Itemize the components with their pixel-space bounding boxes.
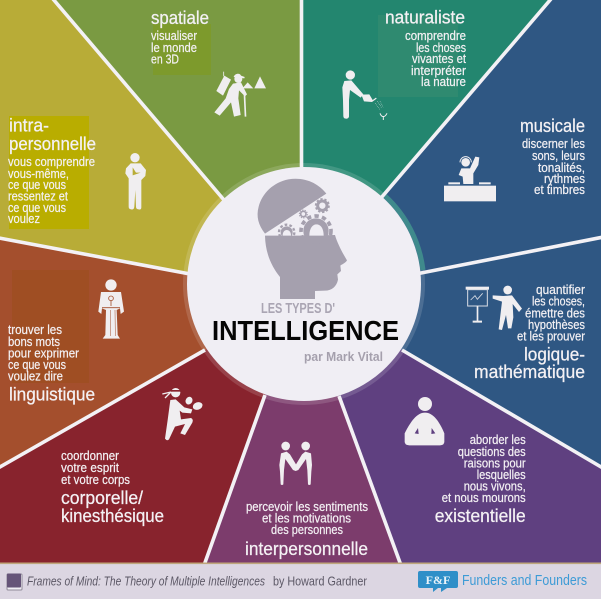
text: existentielle: existentielle xyxy=(435,506,526,526)
footer author: by Howard Gardner xyxy=(273,574,368,589)
text: existentielle: aborder les xyxy=(470,433,526,447)
text: naturaliste: naturaliste xyxy=(385,8,465,28)
text: logique-mathématique: mathématique xyxy=(474,362,585,382)
icon: person watering plant xyxy=(342,70,387,120)
text: existentielle: nous vivons, xyxy=(464,480,526,494)
text: logique-mathématique: hypothèses xyxy=(528,318,585,332)
text: logique-mathématique: émettre des xyxy=(525,307,585,321)
text: spatiale: en 3D xyxy=(151,52,179,66)
text: musicale: et timbres xyxy=(534,183,585,197)
text: musicale: tonalités, xyxy=(538,161,585,175)
text: logique-mathématique: les choses, xyxy=(532,295,585,309)
text: naturaliste xyxy=(385,8,466,89)
text: logique-mathématique: quantifier xyxy=(536,283,585,297)
icon: thinking person xyxy=(125,153,146,209)
sector: spatiale xyxy=(54,0,304,284)
footer citation: Frames of Mind: The Theory of Multiple Intelligences xyxy=(27,574,265,589)
highlight box: intra-personnelle xyxy=(9,116,89,229)
logo: F&F xyxy=(418,571,458,592)
sector: intra-personnelle xyxy=(0,0,304,284)
highlight box: naturaliste xyxy=(378,15,458,97)
text: intra-personnelle: vous-même, xyxy=(8,167,69,181)
icon: DJ xyxy=(444,157,496,201)
text: interpersonnelle: et les motivations xyxy=(262,512,351,526)
text: interpersonnelle: interpersonnelle xyxy=(245,539,368,559)
footer bar xyxy=(0,562,601,599)
text: interpersonnelle: des personnes xyxy=(271,523,343,537)
sector: linguistique xyxy=(0,238,304,467)
centre ring xyxy=(183,163,425,405)
text: musicale: sons, leurs xyxy=(532,149,585,163)
text: corporelle/kinesthésique: corporelle/ xyxy=(61,488,143,508)
text: intra-personnelle: ce que vous xyxy=(8,201,66,215)
text: spatiale: le monde xyxy=(151,41,197,55)
text: linguistique xyxy=(8,323,95,405)
text: corporelle/kinesthésique: et votre corps xyxy=(61,473,130,487)
icon: meditating figure xyxy=(405,397,444,445)
highlight box: linguistique xyxy=(12,270,89,383)
icon: boxer xyxy=(162,388,204,440)
text: naturaliste: interpréter xyxy=(411,64,466,78)
text: existentielle xyxy=(435,433,526,526)
text: existentielle: lesquelles xyxy=(477,468,526,482)
text: intra-personnelle: personnelle xyxy=(9,134,96,154)
text: spatiale: spatiale xyxy=(151,8,209,28)
text: existentielle: raisons pour xyxy=(464,457,526,471)
text: logique-mathématique xyxy=(474,283,585,382)
text: musicale xyxy=(520,116,585,197)
text: intra-personnelle: vous comprendre xyxy=(8,155,95,169)
text: logique-mathématique: et les prouver xyxy=(517,330,585,344)
icon: two people shaking hands xyxy=(279,442,312,485)
text: existentielle: questions des xyxy=(458,445,526,459)
logo: F&F: F&F xyxy=(426,573,450,587)
icon: hiker xyxy=(214,72,266,117)
text: linguistique: pour exprimer xyxy=(8,347,79,361)
ring tint: musicale xyxy=(385,196,423,270)
sector: corporelle/kinesthésique xyxy=(0,284,304,563)
text: linguistique: voulez dire xyxy=(8,370,63,384)
text: naturaliste: la nature xyxy=(421,75,466,89)
text: corporelle/kinesthésique: coordonner xyxy=(61,449,119,463)
text: musicale: rythmes xyxy=(544,172,585,186)
sector: musicale xyxy=(304,0,601,284)
text: corporelle/kinesthésique: votre esprit xyxy=(61,461,119,475)
sector: naturaliste xyxy=(302,0,550,284)
text: intra-personnelle: intra- xyxy=(9,116,49,136)
text: intra-personnelle: ce que vous xyxy=(8,178,66,192)
icon: speaker at podium xyxy=(98,279,124,339)
icon: book xyxy=(7,574,22,590)
icon: head with gears xyxy=(258,179,347,299)
text: intra-personnelle xyxy=(8,116,96,226)
text: corporelle/kinesthésique: kinesthésique xyxy=(61,506,164,526)
text: naturaliste: comprendre xyxy=(405,29,466,43)
author: par Mark Vital: par Mark Vital xyxy=(304,350,383,364)
text: linguistique: ce que vous xyxy=(8,358,66,372)
text: spatiale xyxy=(151,8,209,66)
text: musicale: musicale xyxy=(520,116,585,136)
text: naturaliste: vivantes et xyxy=(412,52,466,66)
text: musicale: discerner les xyxy=(522,137,585,151)
text: existentielle: et nous mourons xyxy=(442,491,526,505)
sector: existentielle xyxy=(304,284,601,563)
text: intra-personnelle: ressentez et xyxy=(8,190,68,204)
sector: logique-mathématique xyxy=(304,238,601,467)
highlight box: spatiale xyxy=(153,24,211,75)
text: linguistique: bons mots xyxy=(8,335,60,349)
text: linguistique: linguistique xyxy=(9,385,95,405)
text: linguistique: trouver les xyxy=(8,323,62,337)
icon: presenter at chart xyxy=(466,286,522,330)
text: spatiale: visualiser xyxy=(151,29,197,43)
text: corporelle/kinesthésique xyxy=(61,449,164,526)
title: intelligence: INTELLIGENCE xyxy=(212,315,399,346)
title: les types d': LES TYPES D' xyxy=(261,300,335,317)
text: naturaliste: les choses xyxy=(416,41,466,55)
text: intra-personnelle: voulez xyxy=(8,212,40,226)
text: interpersonnelle xyxy=(245,500,368,559)
text: logique-mathématique: logique- xyxy=(524,345,585,365)
sector: interpersonnelle xyxy=(205,284,400,563)
text: interpersonnelle: percevoir les sentiments xyxy=(246,500,368,514)
centre circle xyxy=(187,167,421,401)
